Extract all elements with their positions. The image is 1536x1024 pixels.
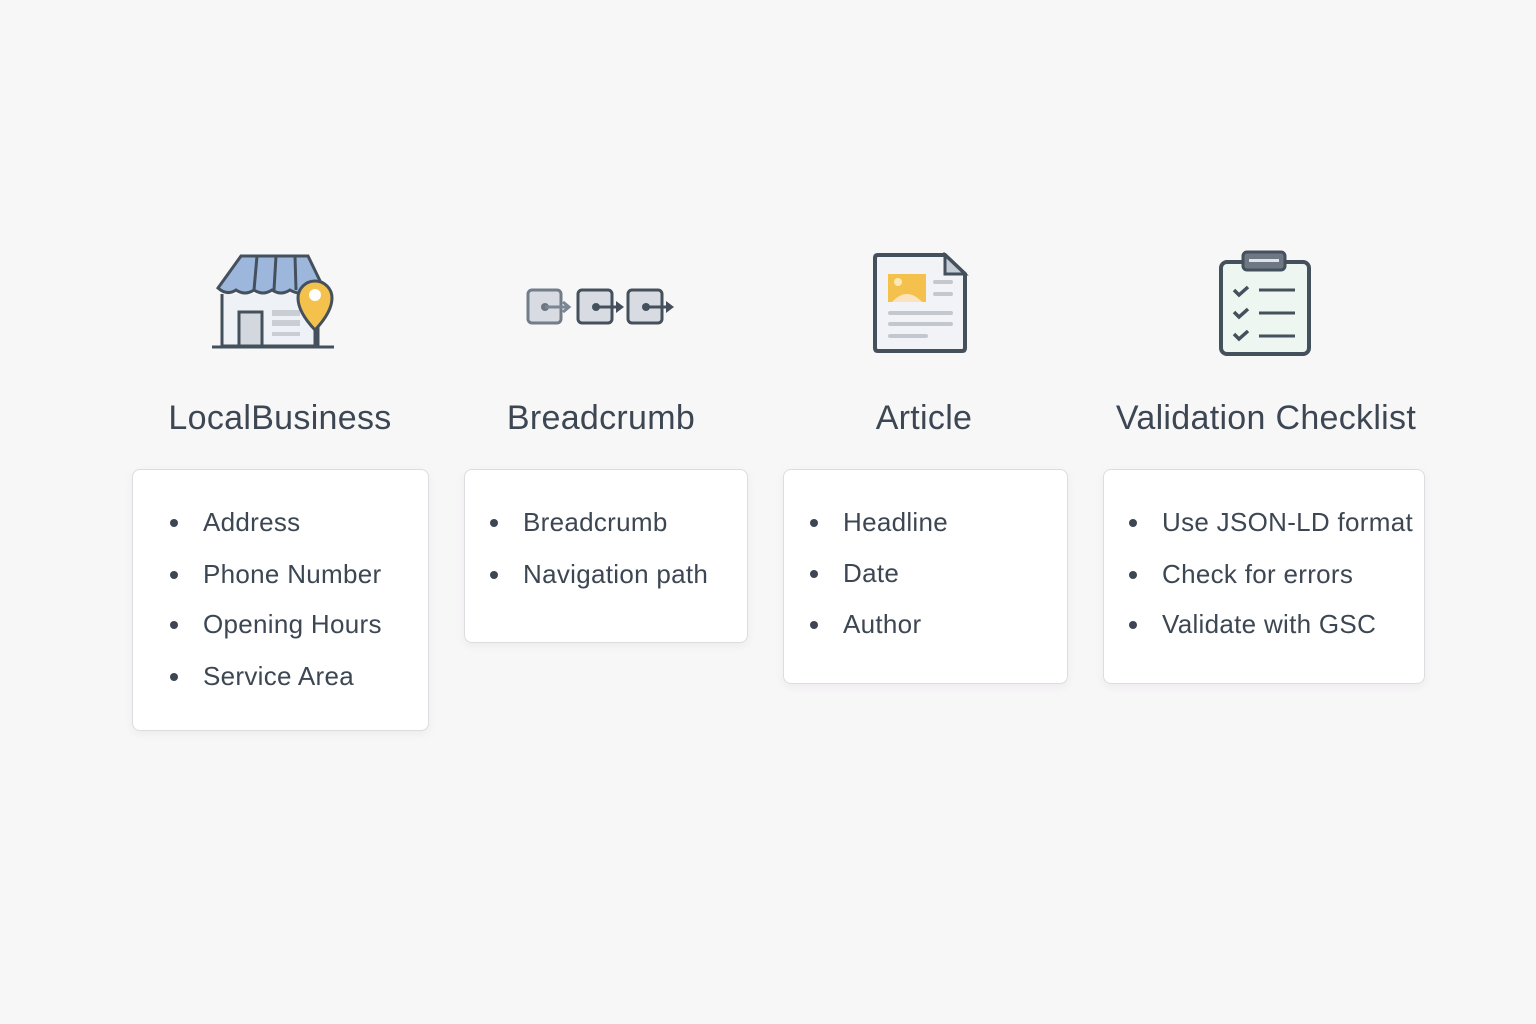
panel: Article: Headline bbox=[843, 507, 948, 537]
panel: Breadcrumb: Breadcrumb bbox=[523, 507, 668, 537]
heading: Validation Checklist: Validation Checklist bbox=[1116, 399, 1416, 437]
panel: Validation Checklist: Use JSON-LD format bbox=[1162, 507, 1413, 537]
icon: breadcrumb chain bbox=[526, 288, 674, 324]
panel: LocalBusiness bbox=[132, 469, 429, 731]
panel: Breadcrumb bbox=[464, 469, 748, 643]
panel: LocalBusiness: Opening Hours bbox=[203, 609, 382, 639]
panel: LocalBusiness: Phone Number bbox=[203, 559, 381, 589]
icon: article document bbox=[873, 252, 969, 353]
panel: Validation Checklist bbox=[1103, 469, 1425, 684]
panel: LocalBusiness: Address bbox=[203, 507, 300, 537]
heading: Breadcrumb: Breadcrumb bbox=[507, 399, 695, 437]
icon: storefront bbox=[212, 254, 334, 348]
icon: clipboard checklist bbox=[1219, 250, 1311, 356]
heading: Article: Article bbox=[876, 399, 972, 437]
panel: Article bbox=[783, 469, 1068, 684]
panel: Article: Author bbox=[843, 609, 921, 639]
panel: Breadcrumb: Navigation path bbox=[523, 559, 708, 589]
panel: Article: Date bbox=[843, 558, 899, 588]
heading: LocalBusiness: LocalBusiness bbox=[168, 399, 392, 437]
panel: Validation Checklist: Validate with GSC bbox=[1162, 609, 1376, 639]
panel: Validation Checklist: Check for errors bbox=[1162, 559, 1353, 589]
panel: LocalBusiness: Service Area bbox=[203, 661, 354, 691]
